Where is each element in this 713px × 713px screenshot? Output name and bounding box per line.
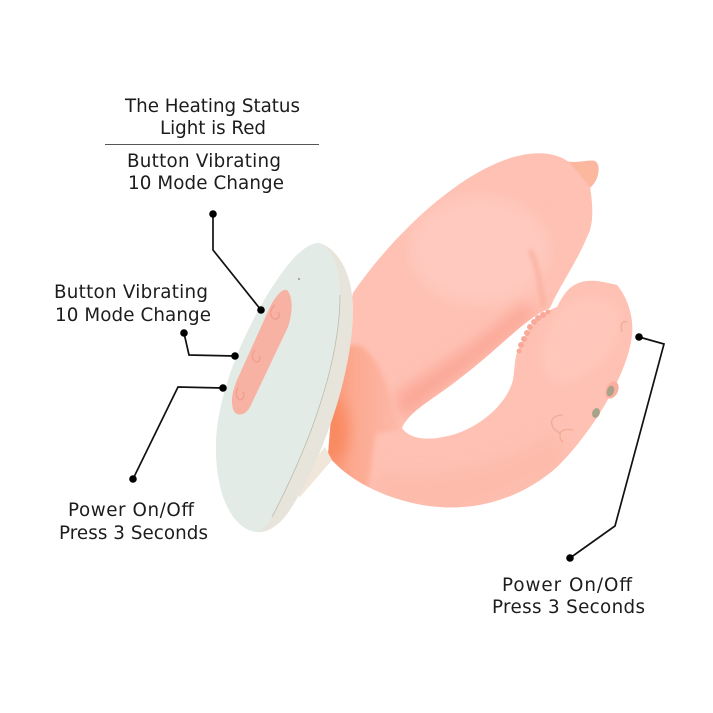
button glyphs [236,305,279,400]
face edge line [272,295,340,517]
orange glow [328,398,354,462]
label: remote power: Power On/Off [68,500,194,521]
collar [328,344,398,488]
product: main body [316,153,632,520]
label: middle button: 10 Mode Change [55,305,211,326]
label: middle button [54,282,211,326]
remote control [216,243,353,532]
label: remote power: Press 3 Seconds [59,523,208,544]
indicator light [298,278,300,280]
label: top button: Button Vibrating [127,151,281,172]
label: remote power [59,500,208,544]
label: device power: Press 3 Seconds [492,597,645,618]
icon marks [552,322,627,442]
remote rim [216,243,353,532]
label: device power: Power On/Off [502,575,632,596]
contact points [591,379,621,419]
label: top button: 10 Mode Change [128,173,284,194]
callout: remote power leader [129,384,227,483]
body silhouette [328,153,632,508]
button strip [232,290,292,415]
arm highlight [542,297,621,385]
label: middle button: Button Vibrating [54,282,208,303]
inner edge shadow [395,305,540,420]
remote face [216,243,340,532]
heading label: heating status: The Heating Status [124,96,300,117]
callout: top button leader [209,210,265,314]
label: device power [492,575,645,618]
divider line [105,144,319,146]
body shading [328,199,568,508]
heading label: heating status: Light is Red [160,118,266,139]
tip [566,161,599,189]
arm lower tone [374,456,568,508]
upper highlight [414,199,546,302]
ridged texture [516,310,550,354]
callout: device power leader [566,333,664,562]
crease [530,250,544,308]
stem behind remote [290,447,332,497]
label: top button [127,151,284,194]
heading label: heating status [124,96,300,139]
callout: middle button leader [180,329,239,360]
